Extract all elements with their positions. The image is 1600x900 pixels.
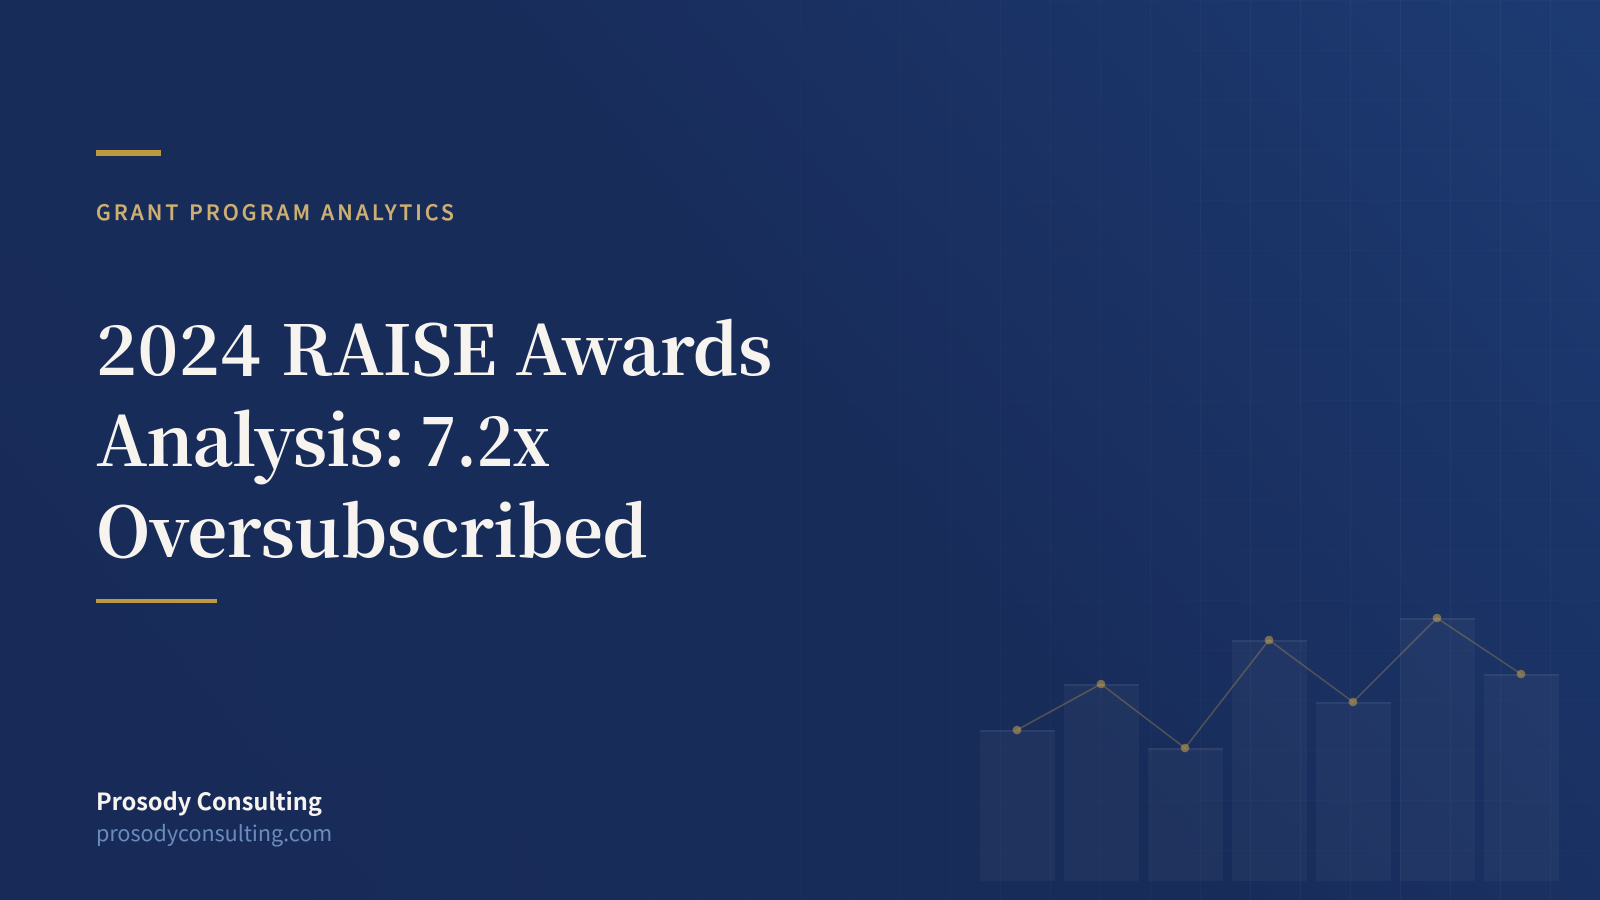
- eyebrow label: GRANT PROGRAM ANALYTICS: [96, 197, 457, 227]
- title: RAISE: [281, 296, 496, 395]
- title: Analysis:: [96, 387, 405, 486]
- trend line markers: [1013, 614, 1525, 752]
- title: 2024: [96, 296, 262, 395]
- title: Awards: [515, 296, 772, 395]
- website: prosodyconsulting.com: [96, 817, 332, 848]
- title: 7.2x: [420, 387, 550, 486]
- organisation name: Prosody Consulting: [96, 783, 322, 817]
- bars: [980, 618, 1559, 881]
- title: Oversubscribed: [96, 478, 648, 577]
- title underline: [96, 599, 217, 603]
- trend line: [1017, 618, 1521, 748]
- title: [96, 296, 772, 577]
- top accent bar: [96, 150, 161, 156]
